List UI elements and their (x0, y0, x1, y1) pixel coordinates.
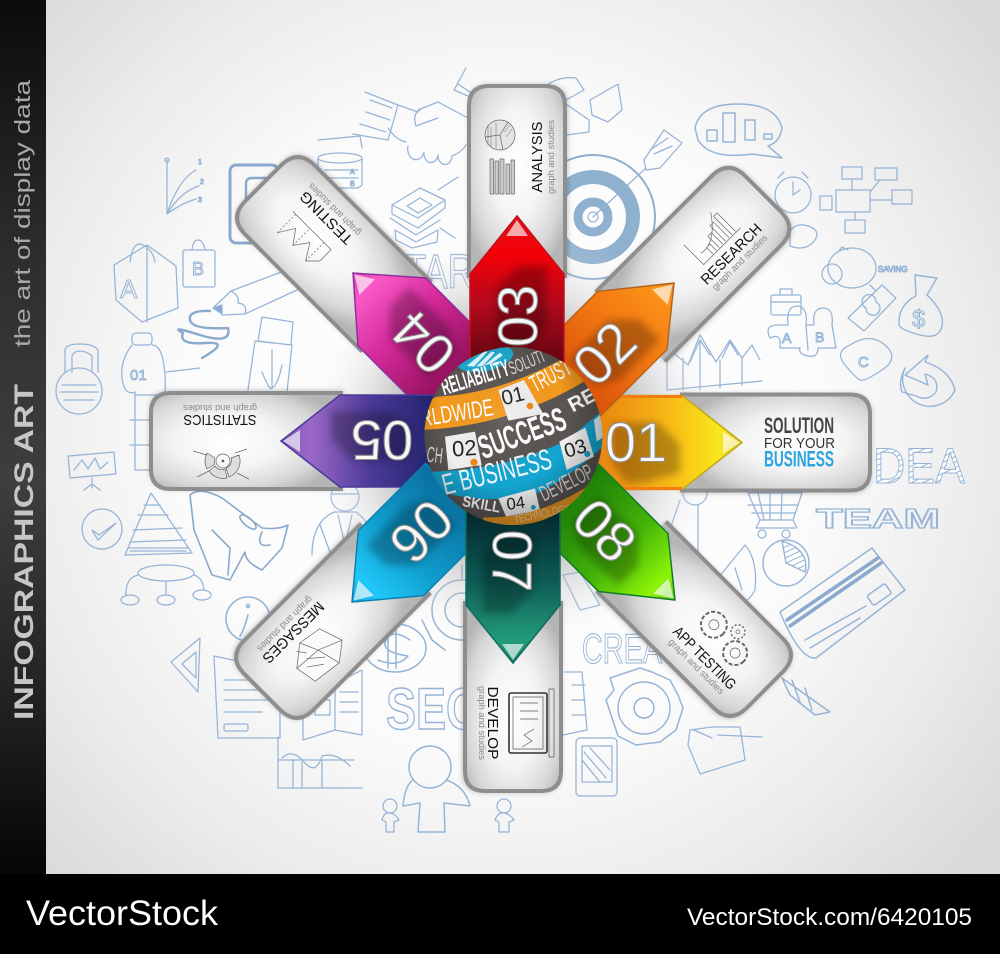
content: testing: TESTING (296, 187, 357, 248)
arrow 07 teal: 07 (481, 530, 544, 592)
globe: tile 02 (445, 432, 482, 470)
doodle: rocket (190, 491, 288, 580)
doodle: set square (171, 638, 200, 692)
doodle: shopping bag A: A (120, 274, 138, 304)
card 06 (228, 524, 430, 726)
globe: cyan band (432, 413, 602, 500)
doodle: person right (668, 481, 707, 555)
doodle: database list: B (350, 181, 355, 188)
doodle: credit card (780, 548, 905, 658)
arrow 05 purple: 05 (351, 409, 413, 472)
doodle: books (390, 177, 458, 248)
sketch doodles background (56, 68, 966, 832)
globe: shading (424, 347, 602, 525)
content: app testing (663, 594, 768, 700)
content: messages: MESSAGES (259, 598, 327, 666)
arrow 07 teal (466, 503, 560, 663)
doodle: business person (312, 483, 372, 555)
arrow 06 cyan (319, 463, 491, 635)
globe: success text: SUCCESS (473, 401, 571, 467)
doodle: shopping bag B: B (192, 259, 204, 279)
doodle: person (403, 746, 470, 832)
icon: gears (693, 602, 761, 670)
doodle: database list: A (350, 169, 355, 176)
globe: business text: E BUSINESS (439, 443, 555, 502)
content: analysis: ANALYSIS (529, 122, 546, 192)
globe: white blob (594, 415, 602, 442)
doodle: laptop (563, 572, 600, 610)
doodle: shopping bag A (114, 244, 178, 322)
doodle: speech bubble with coins (695, 104, 782, 158)
globe: lower dark band (536, 449, 602, 494)
content: testing (269, 180, 364, 274)
doodle: gear left (422, 562, 492, 650)
doodle: newspaper (303, 670, 362, 740)
doodle: handshake (353, 68, 470, 165)
content: statistics (183, 402, 257, 479)
doodle: CREATIVE lettering: CREA (582, 625, 662, 672)
content: statistics: graph and studies (183, 402, 257, 413)
content: testing: graph and studies (306, 180, 364, 238)
text: solution for your business: SOLUTION (764, 413, 834, 438)
doodle: mountain chart (667, 335, 762, 390)
doodle: SEO letters: SEO (386, 677, 481, 742)
doodle: curve chart: 3 (198, 197, 202, 204)
globe: tile 04: 04 (505, 493, 526, 514)
icon: radial diagram (193, 449, 249, 479)
card 05 (151, 393, 343, 489)
globe: develop text: DEVELOP (535, 459, 597, 506)
doodle: banknote (848, 285, 896, 331)
globe: skill text: SKILL (461, 493, 502, 517)
doodle: pencil (213, 268, 297, 315)
doodle: frame (230, 165, 278, 243)
doodle: info circle (226, 597, 270, 641)
sidebar: tagline: the art of display data (10, 79, 35, 347)
card 08 (597, 522, 799, 724)
content: develop (476, 686, 554, 760)
doodle: puzzle: B (815, 329, 824, 345)
icon: line chart (275, 211, 331, 268)
doodle: circular arrow (901, 355, 955, 406)
doodle: curve chart: 2 (200, 179, 204, 186)
globe: res text: RES (564, 377, 613, 417)
content: analysis (485, 120, 557, 194)
arrow 02 orange: 02 (560, 309, 649, 398)
globe: reliability band text: RELIABILITY (438, 355, 513, 401)
doodle: bottle: 01 (130, 367, 147, 384)
arrow 05 purple (281, 395, 441, 487)
doodle: small person right (495, 799, 514, 832)
doodle: shopping bag B (183, 240, 215, 287)
doodle: tie (782, 678, 830, 715)
arrow 04 magenta (319, 239, 493, 413)
doodle: phone (576, 738, 617, 796)
cards (151, 86, 870, 791)
arrow 08 green (535, 464, 705, 634)
doodle: iron (718, 545, 756, 605)
arrow 03 red: 03 (486, 285, 549, 347)
doodle: STAR lettering: TAR (404, 246, 474, 299)
arrow 01 yellow: 01 (605, 410, 667, 474)
doodle: flow chart (820, 167, 912, 233)
globe: orange band (420, 358, 587, 430)
globe: reliability band text: SOLUTI (505, 346, 547, 379)
doodle: piggy bank (822, 247, 908, 290)
text: solution for your business: FOR YOUR (764, 435, 835, 452)
doodle: notes and pen (688, 727, 762, 774)
globe: technology text: TECHNOLOGY (513, 503, 571, 526)
doodle: money bag: $ (912, 306, 925, 333)
arrow 03 red (470, 216, 564, 376)
doodle: pyramid (125, 493, 192, 555)
doodle: presentation board (68, 452, 116, 490)
doodle: money bag (899, 275, 942, 336)
doodle: splat C (841, 338, 892, 380)
card 07 (465, 601, 561, 791)
content: messages (252, 591, 360, 699)
icon: tablet (509, 689, 554, 757)
doodle: check circle (82, 509, 122, 549)
card contents (183, 120, 835, 760)
doodle: dollar circle (364, 624, 426, 672)
text: solution for your business: BUSINESS (764, 446, 834, 472)
footer bar (0, 874, 1000, 954)
doodle: piggy bank: SAVING (878, 265, 908, 274)
content: develop: DEVELOP (484, 686, 501, 760)
sidebar: title: INFOGRAPHICS ART (9, 383, 39, 720)
footer: url: VectorStock.com/6420105 (687, 904, 972, 931)
doodle: IDEA lettering: DEA (873, 438, 966, 494)
doodle: notebook (563, 672, 587, 735)
content: research: RESEARCH (698, 220, 766, 288)
doodle: bottle (122, 333, 200, 470)
content: statistics: STATISTICS (184, 411, 256, 428)
doodle: usb stick (248, 317, 293, 392)
globe: trust text: TRUST (525, 354, 576, 398)
doodle: small person left (382, 799, 399, 832)
card 03 (469, 86, 565, 278)
doodle: shopping cart (748, 493, 802, 538)
globe: tile 02: 02 (451, 435, 477, 462)
doodle: TEAM lettering: TEAM (816, 503, 940, 534)
globe: research text left: CH (425, 442, 444, 468)
doodle: wave chart (278, 737, 362, 788)
doodle: target with arrow (531, 130, 682, 279)
doodle: big gear (606, 668, 683, 745)
globe: orange bottom band (483, 487, 586, 525)
doodle: curve chart (165, 158, 204, 214)
globe: tile 01 (498, 380, 543, 421)
doodle: puzzle: A (782, 330, 792, 346)
doodle: pie clock (763, 540, 809, 586)
globe: worldwide text: WORLDWIDE (391, 394, 495, 437)
card 04 (229, 149, 431, 351)
content: research: graph and studies (710, 233, 770, 293)
arrow 08 green: 08 (560, 486, 649, 575)
icon: growth chart (681, 205, 740, 265)
arrow 06 cyan: 06 (377, 487, 466, 576)
content: analysis: graph and studies (546, 120, 557, 194)
arrow 02 orange (534, 249, 704, 419)
doodle: splat C: C (858, 354, 869, 371)
doodle: org chart (121, 565, 211, 605)
icon: pie (485, 120, 515, 150)
globe: reliability band text (441, 350, 545, 396)
globe: keywords sphere (424, 347, 602, 525)
doodle: pie pieces (547, 78, 622, 135)
doodle: database list (318, 136, 362, 188)
content: messages: graph and studies (254, 594, 315, 654)
doodle: briefcase (771, 289, 801, 315)
content: app testing: graph and studies (666, 637, 726, 697)
doodle: cloud (790, 225, 817, 248)
arrow 04 magenta: 04 (379, 298, 468, 387)
icon: bars (490, 159, 514, 194)
doodle: clock (775, 172, 811, 213)
doodle: squiggle (178, 311, 228, 358)
content: develop: graph and studies (476, 686, 487, 760)
card 01 (680, 394, 870, 490)
globe: tile 03 (559, 428, 594, 470)
side bar (0, 0, 46, 874)
footer: brand: VectorStock (26, 894, 219, 933)
doodle: padlock (56, 344, 102, 414)
content: research (672, 195, 772, 295)
content: app testing: APP TESTING (669, 623, 739, 693)
text: solution for your business (764, 413, 835, 472)
doodle: document (214, 656, 280, 738)
doodle: curve chart: 1 (198, 159, 202, 166)
card 02 (596, 159, 798, 361)
doodle: puzzle (768, 306, 836, 356)
arrow 01 yellow (582, 396, 742, 490)
globe: tile 04 (498, 488, 540, 517)
icon: folded pie (286, 620, 352, 687)
globe: tile 01: 01 (499, 382, 527, 410)
globe: tile 03: 03 (562, 435, 589, 463)
centre shadow (299, 225, 729, 655)
globe: cyan cap (458, 347, 514, 372)
